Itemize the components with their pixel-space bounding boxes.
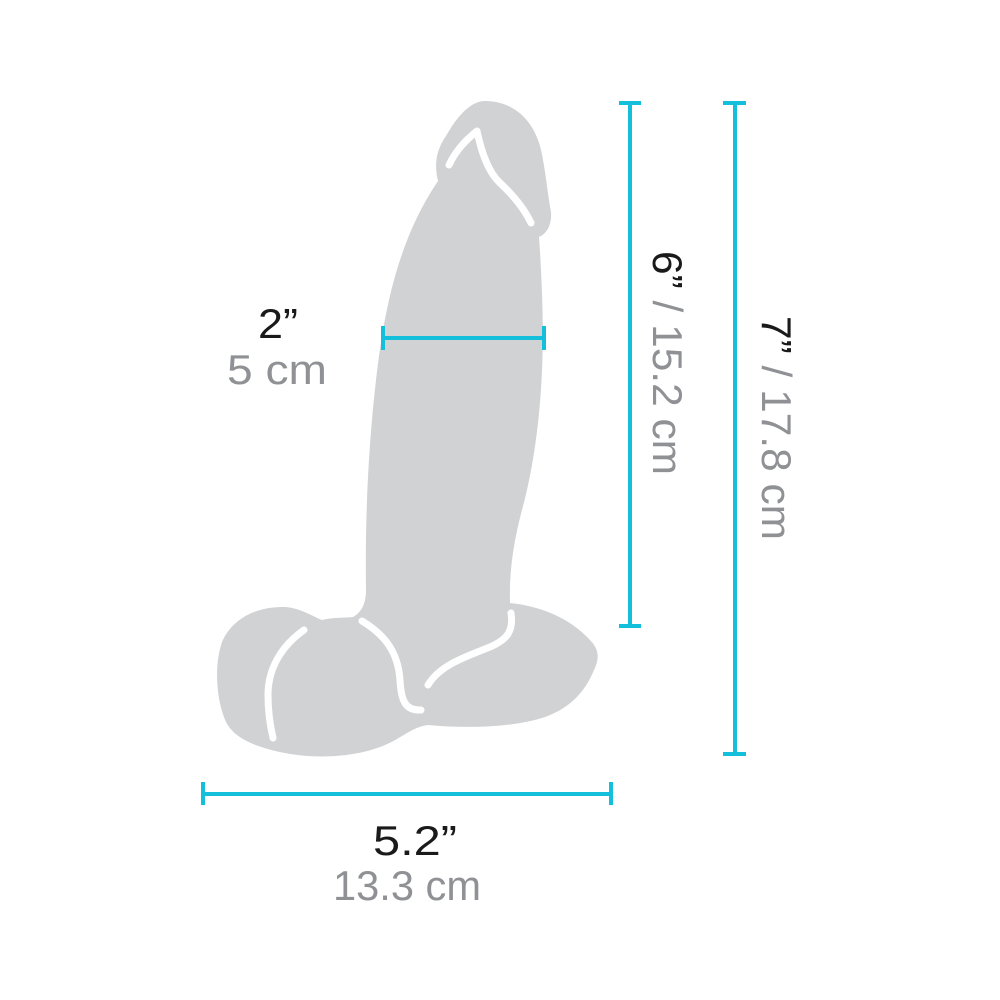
girth label: 5 cm (227, 346, 327, 393)
insertable length label: 6” / 15.2 cm (644, 251, 691, 475)
product silhouette (217, 101, 598, 756)
width label (333, 817, 481, 909)
width measure line (203, 782, 611, 805)
girth measure line (383, 326, 544, 350)
total length label: 7” / 17.8 cm (753, 316, 800, 540)
width label: 5.2” (373, 817, 457, 864)
girth label (227, 300, 327, 393)
total length measure line (723, 103, 746, 754)
contour lines (268, 131, 531, 738)
girth label: 2” (258, 300, 298, 347)
insertable length measure line (619, 103, 641, 626)
body shape (217, 101, 598, 756)
width label: 13.3 cm (333, 862, 481, 909)
